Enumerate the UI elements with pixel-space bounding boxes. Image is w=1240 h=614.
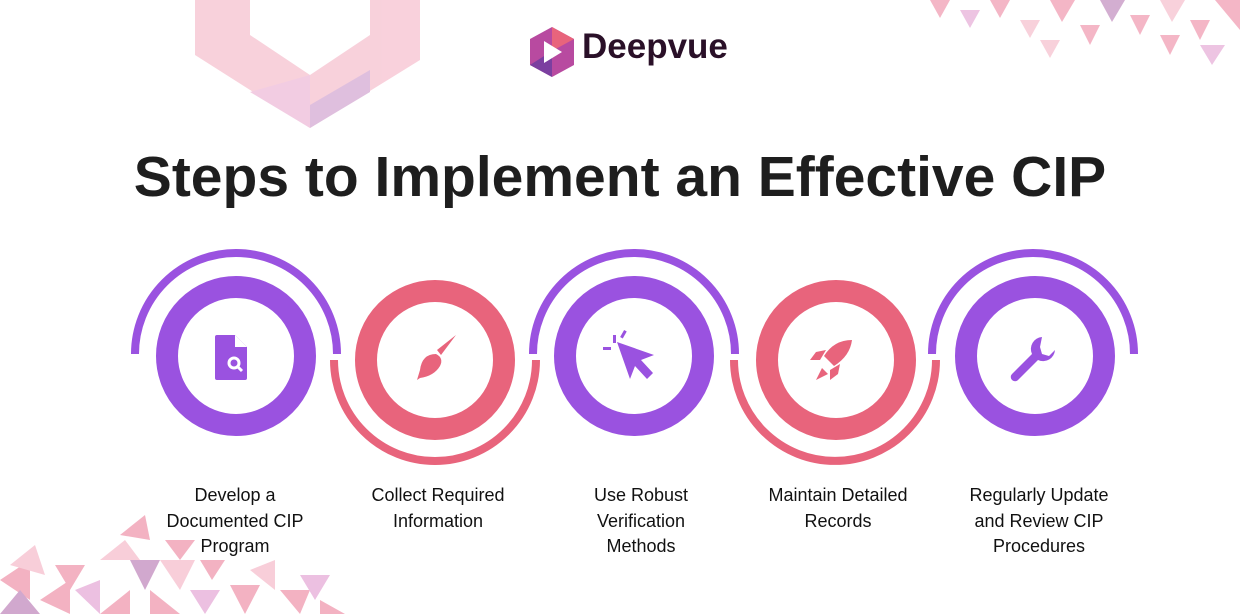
label step 2: Collect Required Information <box>371 485 505 530</box>
logo <box>530 27 728 77</box>
step 4 circle <box>734 291 936 461</box>
title: Steps to Implement an Effective CIP <box>134 145 1106 209</box>
step 3 circle <box>533 253 735 425</box>
icon: cursor click <box>603 330 654 379</box>
label step 4: Maintain Detailed Records <box>768 485 908 530</box>
icon: rocket <box>810 340 852 380</box>
icon: logo hexagon <box>530 27 574 77</box>
brand name: Deepvue <box>582 27 728 66</box>
step 2 circle <box>334 291 536 461</box>
icon: document search <box>215 335 247 380</box>
label step 5: Regularly Update and Review CIP Procedures <box>969 485 1109 556</box>
icon: paint brush <box>417 335 456 380</box>
label step 3: Use Robust Verification Methods <box>594 485 688 556</box>
label step 1: Develop a Documented CIP Program <box>166 485 304 556</box>
icon: wrench <box>1011 337 1055 381</box>
step 1 circle <box>135 253 337 425</box>
step 5 circle <box>932 253 1134 425</box>
